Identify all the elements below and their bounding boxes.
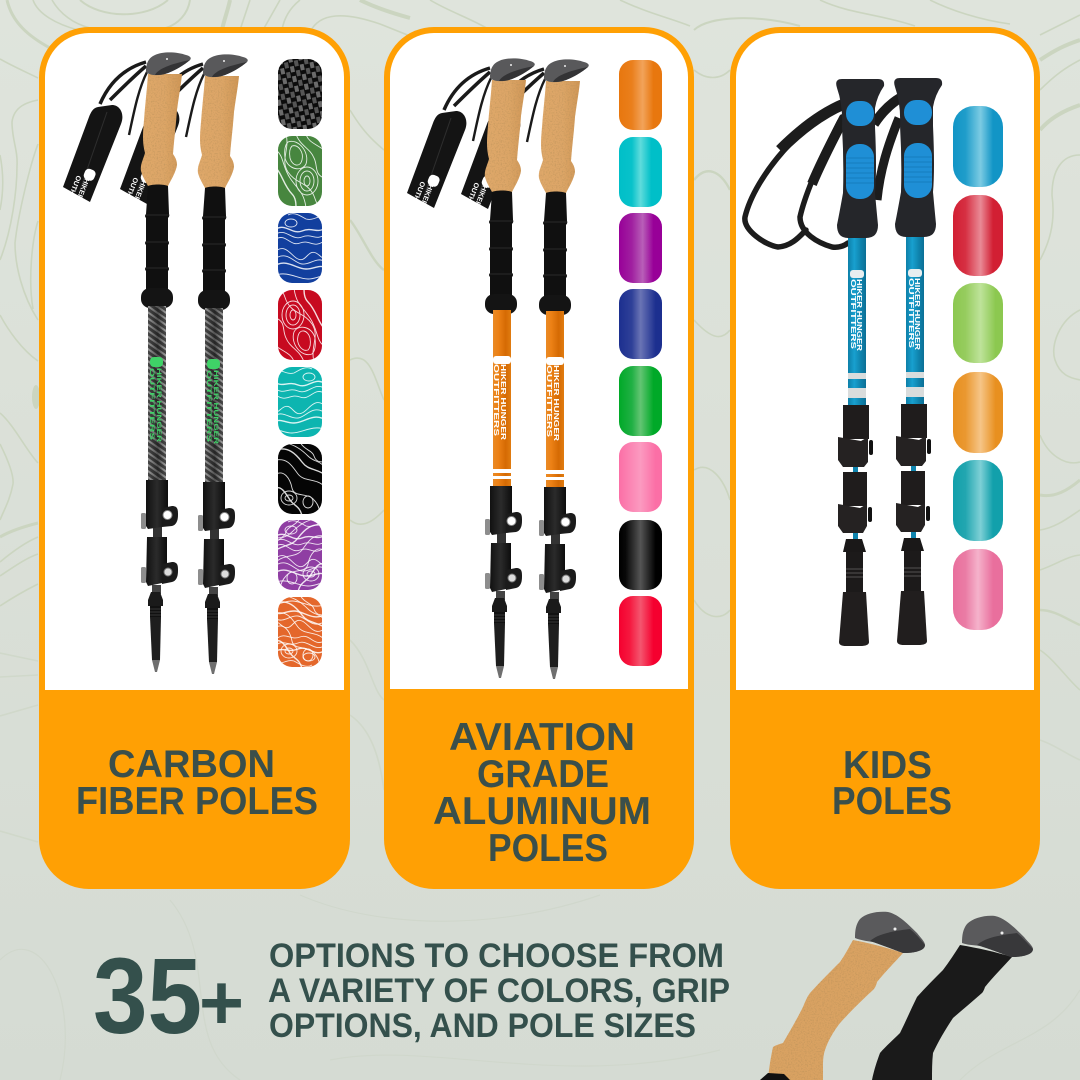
carbon pole right xyxy=(120,54,248,674)
heading: kids poles xyxy=(832,744,952,823)
kids pole left: HIKER HUNGER xyxy=(855,279,862,351)
options text: OPTIONS, AND POLE SIZES xyxy=(269,1007,696,1045)
big number: + xyxy=(199,958,244,1046)
options text: A VARIETY OF COLORS, GRIP xyxy=(268,972,730,1010)
aluminum pole left: OUTFITTERS xyxy=(492,364,499,437)
kids pole left xyxy=(836,79,884,646)
kids wrist straps xyxy=(745,98,900,247)
kids pole right xyxy=(894,78,942,645)
options text xyxy=(268,937,730,1045)
kids pole right: HIKER HUNGER xyxy=(913,278,920,350)
carbon pole left: OUTFITTERS xyxy=(148,368,155,441)
black foam grip close-up xyxy=(872,916,1033,1080)
aluminum colour swatches xyxy=(619,60,662,666)
kids pole right: OUTFITTERS xyxy=(907,278,914,349)
heading: aviation grade aluminum poles: ALUMINUM xyxy=(433,790,651,833)
heading: aviation grade aluminum poles: POLES xyxy=(488,827,608,870)
carbon pole left: HIKER HUNGER xyxy=(155,368,162,442)
kids pole left: OUTFITTERS xyxy=(849,279,856,350)
big number: 35 xyxy=(93,935,202,1056)
carbon pole left xyxy=(63,52,191,672)
cork grip close-up xyxy=(760,912,925,1080)
heading: aviation grade aluminum poles: AVIATION xyxy=(449,716,635,759)
carbon pole right: OUTFITTERS xyxy=(205,370,212,443)
panel: carbon fiber poles xyxy=(39,27,350,889)
aluminum pole right: OUTFITTERS xyxy=(545,365,552,438)
heading: aviation grade aluminum poles: GRADE xyxy=(477,753,609,796)
aluminum pole left xyxy=(407,58,535,678)
aluminum pole right xyxy=(461,59,589,679)
carbon pole right: HIKER HUNGER xyxy=(212,370,219,444)
panel: aviation grade aluminum poles xyxy=(384,27,694,889)
carbon and topographic colour swatches xyxy=(276,59,324,669)
aluminum pole right: HIKER HUNGER xyxy=(552,365,559,441)
heading: carbon fiber poles: FIBER POLES xyxy=(76,780,318,823)
aluminum pole left: HIKER HUNGER xyxy=(499,364,506,440)
heading: carbon fiber poles xyxy=(76,743,318,823)
panel: kids poles xyxy=(730,27,1040,889)
heading: carbon fiber poles: CARBON xyxy=(108,743,275,786)
heading: kids poles: POLES xyxy=(832,780,952,823)
options text: OPTIONS TO CHOOSE FROM xyxy=(269,937,724,975)
heading: aviation grade aluminum poles xyxy=(433,716,651,870)
kids colour swatches xyxy=(953,106,1003,630)
heading: kids poles: KIDS xyxy=(843,744,932,787)
callout: 35+ options xyxy=(93,935,730,1056)
